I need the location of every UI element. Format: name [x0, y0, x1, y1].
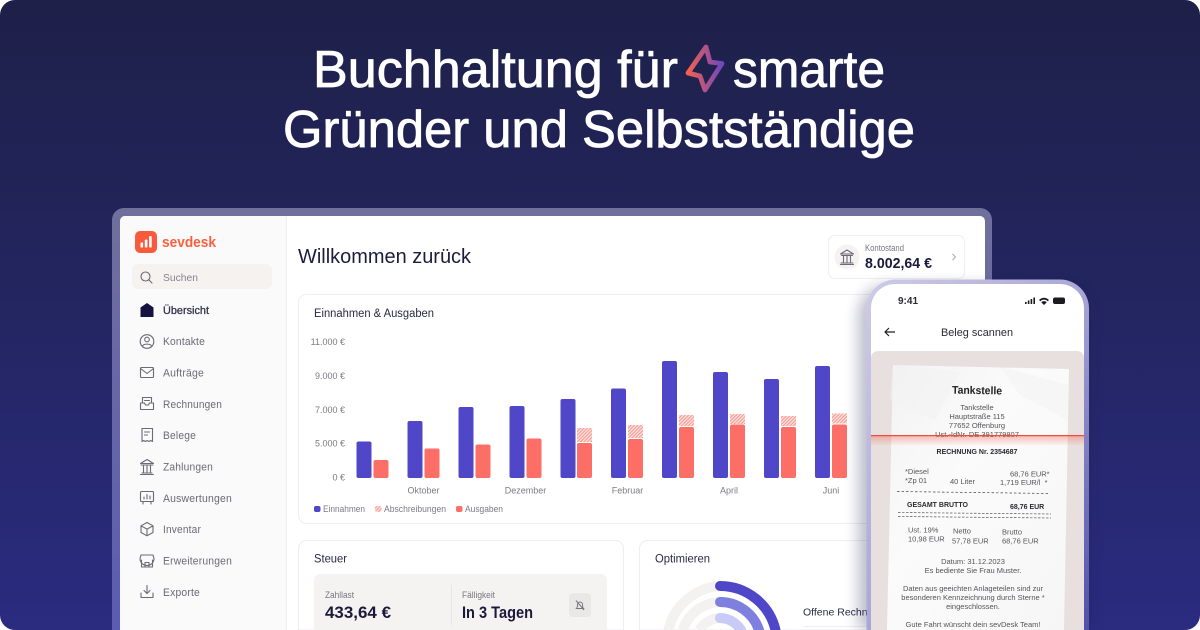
legend: Einnahmen — [323, 504, 365, 514]
receipt — [887, 365, 1069, 630]
nav: Kontakte — [140, 335, 205, 348]
nav: Exporte — [141, 586, 200, 599]
y axis labels: 5.000 € — [315, 438, 345, 448]
panel: optimise: Offene Rechnungen — [803, 606, 897, 618]
title: Buchhaltung für — [313, 41, 678, 99]
nav: Exporte: Exporte — [163, 587, 200, 599]
panel: tax: Fälligkeit — [462, 590, 495, 600]
nav: Auswertungen: Auswertungen — [163, 493, 232, 505]
panel: income and expenses chart — [298, 294, 870, 524]
account balance card: Kontostand — [865, 243, 904, 253]
title: Gründer und Selbstständige — [283, 101, 915, 159]
scan background — [871, 351, 1084, 630]
x axis labels — [408, 487, 839, 496]
nav: Belege: Belege — [163, 430, 196, 442]
x axis labels: Dezember — [505, 486, 546, 496]
icon: muted bell — [569, 593, 591, 617]
receipt: Es bediente Sie Frau Muster. — [925, 566, 1021, 575]
nav: Kontakte: Kontakte — [163, 336, 205, 348]
receipt: Gute Fahrt wünscht dein sevDesk Team! — [906, 620, 1040, 629]
receipt: *Diesel — [905, 467, 929, 476]
y axis labels: 0 € — [332, 472, 345, 482]
receipt: Ust. 19% — [908, 526, 939, 534]
nav: Zahlungen — [140, 460, 213, 474]
receipt: RECHNUNG Nr. 2354687 — [937, 449, 1018, 456]
receipt: Ust.-IdNr. DE 391779807 — [935, 430, 1019, 439]
app window — [112, 208, 992, 630]
x axis labels: Oktober — [407, 486, 440, 496]
receipt: 1,719 EUR/l * — [1000, 478, 1048, 487]
receipt: Netto — [953, 526, 971, 536]
nav: Auswertungen — [140, 492, 232, 505]
receipt: Brutto — [1002, 528, 1022, 536]
account balance card — [828, 236, 964, 278]
status bar — [898, 297, 1065, 305]
receipt: 68,76 EUR — [1010, 504, 1044, 511]
panel: tax: Zahllast — [325, 590, 354, 600]
legend — [314, 506, 502, 514]
nav: Übersicht — [140, 303, 209, 317]
receipt: Tankstelle — [960, 403, 994, 412]
receipt: Hauptstraße 115 — [949, 412, 1005, 421]
nav: Übersicht: Übersicht — [163, 305, 209, 317]
phone heading: Beleg scannen — [941, 327, 1013, 339]
panel: tax: Steuer — [314, 554, 347, 566]
receipt: 68,76 EUR* — [1010, 470, 1050, 478]
panel: tax: 433,64 € — [325, 604, 391, 622]
nav: Inventar — [141, 522, 201, 536]
bars: Abschreibungen — [577, 414, 847, 442]
title — [283, 41, 915, 159]
phone — [866, 280, 1089, 630]
nav: Inventar: Inventar — [163, 524, 201, 536]
x axis labels: Februar — [612, 486, 643, 496]
nav: Erweiterungen — [140, 555, 232, 568]
x axis labels: Juni — [823, 486, 839, 496]
receipt: 68,76 EUR — [1002, 536, 1039, 546]
bars: Ausgaben — [374, 424, 847, 478]
receipt: *Zp 01 — [905, 476, 927, 485]
account balance card: 8.002,64 € — [865, 255, 933, 272]
radial progress chart — [668, 586, 776, 630]
receipt: Tankstelle — [952, 385, 1002, 397]
nav: Zahlungen: Zahlungen — [163, 462, 213, 474]
legend: Ausgaben — [465, 504, 503, 514]
icon: lightning bolt — [688, 47, 722, 90]
nav: Rechnungen: Rechnungen — [163, 399, 222, 411]
nav: Aufträge: Aufträge — [163, 368, 204, 380]
title: smarte — [733, 41, 885, 99]
logo — [135, 231, 217, 253]
legend: Abschreibungen — [384, 504, 446, 514]
panel: tax: In 3 Tagen — [462, 604, 533, 622]
y axis labels — [311, 337, 345, 482]
receipt: Datum: 31.12.2023 — [941, 557, 1005, 566]
status bar: 9:41 — [898, 295, 918, 307]
panel: sidebar — [120, 216, 287, 630]
nav: Belege — [142, 428, 196, 442]
receipt: Daten aus geeichten Anlageteilen sind zur — [903, 584, 1044, 593]
x axis labels: April — [720, 486, 738, 496]
nav: Rechnungen — [140, 398, 222, 411]
receipt: 57,78 EUR — [952, 536, 989, 546]
y axis labels: 11.000 € — [311, 337, 345, 347]
panel: optimise: Optimieren — [655, 554, 710, 566]
panel: optimise — [639, 540, 866, 630]
search field: Suchen — [163, 272, 198, 284]
logo: sevdesk — [162, 234, 217, 251]
receipt: GESAMT BRUTTO — [907, 502, 968, 509]
heading: welcome: Willkommen zurück — [298, 246, 472, 268]
y axis labels: 9.000 € — [315, 371, 345, 381]
y axis labels: 7.000 € — [315, 405, 345, 415]
panel: tax — [298, 540, 624, 630]
receipt: 40 Liter — [950, 477, 976, 486]
receipt: 77652 Offenburg — [949, 421, 1005, 430]
icon: back arrow — [885, 328, 895, 336]
receipt: eingeschlossen. — [946, 602, 1000, 611]
scan line — [871, 435, 1084, 446]
receipt: besonderen Kennzeichnung durch Sterne * — [901, 593, 1045, 602]
receipt: 10,98 EUR — [908, 534, 945, 544]
bars: Einnahmen — [356, 361, 830, 478]
phone shadow — [850, 277, 985, 630]
search field — [132, 264, 272, 289]
nav: Erweiterungen: Erweiterungen — [163, 556, 232, 568]
nav: Aufträge — [140, 368, 204, 380]
panel: income and expenses chart: Einnahmen & Ausgaben — [314, 308, 434, 320]
